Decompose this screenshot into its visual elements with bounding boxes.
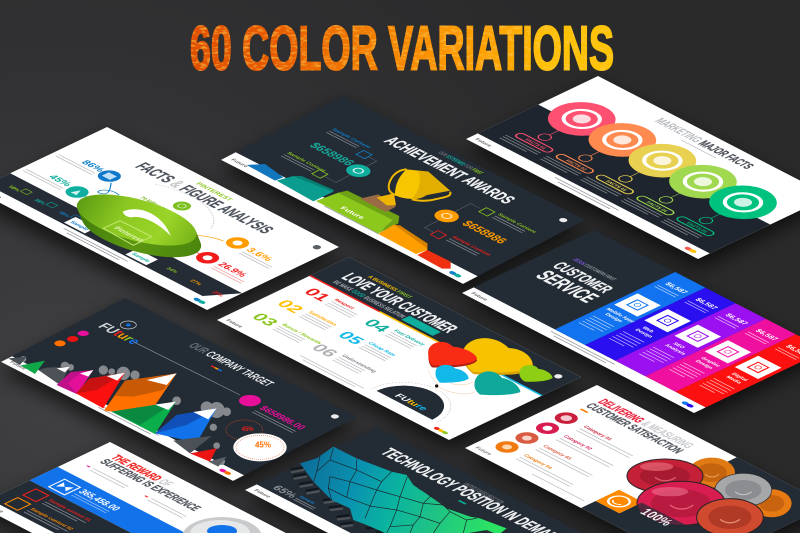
- dark band figures: 34%: [164, 267, 179, 274]
- icon: 3d green disc: [72, 184, 206, 268]
- dark band figures: 27%: [188, 279, 203, 287]
- smiley tile: [596, 490, 643, 513]
- state lines: [313, 448, 477, 533]
- item 05: Cheap Rate: [366, 341, 397, 357]
- heading: [97, 453, 214, 513]
- item 03: [247, 311, 324, 350]
- chart: us map: [292, 447, 507, 533]
- stat: 65%: [269, 484, 300, 500]
- footer: Future: [8, 361, 28, 371]
- dark band figures: Sample: [68, 220, 90, 232]
- category 02: Category 02: [561, 435, 593, 451]
- icon: blue stat: [55, 148, 126, 184]
- heading: LOVE YOUR CUSTOMER: [337, 270, 463, 335]
- colour key: [210, 365, 222, 371]
- column: graphic design: Graphic: [699, 356, 722, 368]
- dark band figures: 39%: [56, 211, 71, 218]
- notes: [84, 465, 186, 518]
- icon: 3d green disc: Pinterest: [112, 225, 146, 243]
- item 05: 05: [333, 329, 368, 347]
- heading: [582, 396, 697, 455]
- icon: red stat: [191, 250, 258, 283]
- logo and list: company target: FUture: [94, 321, 144, 347]
- map shadow stripes: [292, 467, 390, 532]
- value: $658986.00: [256, 405, 308, 431]
- sample content labels: [279, 128, 538, 261]
- chart: smiley discs: [617, 458, 792, 533]
- category 03: [511, 430, 604, 478]
- disc: crimson: [637, 481, 725, 525]
- sample content labels: Sample Content: [330, 128, 372, 149]
- footer: Future: [473, 446, 493, 456]
- item 01: [299, 286, 364, 319]
- column: seo analysis: [615, 303, 766, 376]
- column: seo analysis: Analysis: [663, 343, 687, 356]
- footer: Future: [473, 138, 493, 148]
- category 04: [491, 439, 585, 487]
- category 01: Category 01: [581, 425, 613, 441]
- footer: Future: [229, 158, 249, 168]
- column: seo analysis: SEO: [671, 342, 686, 350]
- orange value: $658986: [459, 219, 511, 245]
- category 03: Category 03: [541, 444, 573, 461]
- icon: reward disc: [182, 517, 262, 533]
- panel: love your customer slide: [217, 257, 581, 440]
- panel: customer service slide: [462, 230, 800, 413]
- heading: THE REWARD OF: [108, 453, 177, 488]
- panel: company target slide: [1, 298, 357, 481]
- trophy: [360, 169, 450, 212]
- stat: [269, 484, 322, 511]
- footer logo: Future: [252, 489, 272, 499]
- logo dome: FUture: [392, 392, 430, 412]
- icon: butterfly: [49, 479, 80, 495]
- value: 365,458.00: [75, 488, 122, 512]
- footer: [473, 446, 584, 503]
- step 5: [658, 179, 791, 244]
- chart: mountain targets: [8, 356, 231, 467]
- teal marker: [458, 500, 467, 504]
- icon: center green badge: 70 Million Users: [138, 196, 176, 215]
- icon: center green badge: [138, 188, 195, 217]
- icon: orange stat: [220, 235, 287, 269]
- step 3: FACTS 03: [605, 180, 628, 192]
- column: mobile apps design: [555, 272, 707, 346]
- column: graphic design: [645, 319, 796, 392]
- disc: red orange: [697, 499, 763, 533]
- logo and list: company target: 45%: [255, 441, 271, 450]
- column: digital media: [676, 334, 800, 407]
- heart: green: [519, 365, 553, 382]
- column: web design: [585, 288, 736, 361]
- footer: [229, 103, 569, 278]
- icon: blue stat: 86%: [78, 159, 107, 174]
- panel: marketing major facts slide: [466, 76, 800, 259]
- column: mobile apps design: $6,587: [663, 281, 689, 295]
- column: mobile apps design: Design: [603, 313, 624, 323]
- step 1: [496, 95, 630, 161]
- footer: Future: [224, 319, 244, 329]
- step 2: [537, 116, 670, 182]
- icon: red stat: 26.9%: [215, 261, 249, 279]
- item 02: 02: [273, 298, 307, 315]
- panel: customer satisfaction slide: [465, 385, 800, 533]
- sample content labels: Sample Content: [285, 151, 327, 173]
- heart: cyan: [435, 365, 469, 383]
- chart: balloon hearts: [428, 338, 553, 395]
- category 04: Category 04: [521, 454, 553, 470]
- subheading: A BUSINESS FIRST: [366, 275, 413, 300]
- footer: Future: [469, 292, 489, 302]
- item 03: Bonus / Rewards: [280, 323, 323, 345]
- step 4: [618, 158, 751, 223]
- step 2: FACTS 02: [565, 159, 588, 171]
- icon: orange stat: 3.6%: [243, 247, 275, 263]
- item 04: [359, 317, 427, 351]
- item 06: [307, 342, 379, 378]
- item 01: Respect: [332, 298, 356, 310]
- teal value: $658986: [306, 141, 358, 167]
- item 06: 06: [307, 342, 342, 359]
- item 02: Satisfaction: [306, 311, 338, 327]
- logo and list: company target: 45%: [242, 427, 254, 433]
- icon: orange item: Sample content 02: [28, 507, 74, 531]
- heart: red: [428, 342, 477, 368]
- heart: yellow: [463, 338, 533, 375]
- item 02: [273, 298, 339, 332]
- heading: FACTS & FIGURE ANALYSIS: [131, 160, 278, 236]
- heading: ACHIEVEMENT AWARDS: [380, 134, 520, 206]
- connectors: [324, 152, 480, 233]
- disc: orange back: [688, 458, 735, 488]
- heading: CUSTOMER SATISFACTION: [582, 402, 687, 455]
- sample content labels: Sample Content: [496, 213, 538, 234]
- disc: orange right: [752, 489, 792, 517]
- logo on podium: Future: [339, 206, 365, 221]
- column: graphic design: $6,587: [753, 328, 780, 342]
- dark band figures: 25%: [210, 290, 225, 298]
- column: web design: $6,587: [693, 297, 720, 311]
- column: seo analysis: $6,587: [723, 313, 750, 326]
- logo dome: [372, 373, 470, 422]
- footer: [469, 292, 695, 409]
- item 06: Understanding: [340, 354, 378, 374]
- footer: [0, 134, 323, 305]
- disc: red top: [627, 459, 703, 493]
- footer: [8, 304, 342, 476]
- icon: red item: Sample content 01: [46, 499, 93, 522]
- orange marker: [580, 409, 589, 413]
- dark band figures: [1, 183, 229, 300]
- orange badge: [429, 207, 464, 225]
- logo and list: company target: [54, 321, 287, 461]
- chart: podium blocks and trophy: [247, 164, 451, 269]
- connector curves: [84, 169, 253, 254]
- heading: SERVICE: [530, 268, 605, 305]
- step 5: FACTS 05: [685, 221, 709, 234]
- panel: the reward slide: [0, 442, 342, 533]
- dark band figures: 38%: [32, 198, 47, 206]
- step 1: FACTS 01: [524, 138, 548, 150]
- column: web design: Design: [633, 328, 654, 339]
- item 05: [333, 329, 398, 362]
- panel: 100 percent overlay: [617, 503, 702, 533]
- tagline: BE MAKE GOOD BUSINESS RELATION: [331, 280, 407, 319]
- icon: teal stat: 45%: [45, 174, 74, 188]
- dark band figures: Sample: [129, 252, 151, 263]
- map outline: [300, 447, 507, 533]
- subheading: PINTEREST: [194, 182, 234, 202]
- icon: orange item: [5, 498, 76, 533]
- teal tag: [401, 316, 441, 336]
- step 4: FACTS 04: [645, 201, 669, 213]
- item 04: Fast Delivery: [392, 329, 426, 347]
- step 3: [577, 137, 710, 202]
- heading: CUSTOMER: [548, 260, 617, 295]
- panel: technology position slide: [245, 427, 609, 533]
- icon: red item: [23, 489, 94, 525]
- category 01: [550, 410, 645, 458]
- heading: DELIVERING & MEASURING: [595, 397, 697, 450]
- category 02: [531, 420, 625, 468]
- item 04: 04: [359, 317, 394, 334]
- disc: grey: [715, 473, 772, 507]
- heading: MARKETING MAJOR FACTS: [651, 116, 758, 171]
- column: digital media: Media: [724, 375, 743, 385]
- dark band figures: 58%: [6, 185, 21, 193]
- subheading: OUR ESTEEMED FOR FIRST: [436, 151, 484, 176]
- item 01: 01: [299, 286, 334, 303]
- colour rule: [309, 275, 543, 396]
- column: graphic design: Design: [693, 359, 714, 370]
- icon: teal stat: [21, 164, 93, 200]
- column: digital media: Digital: [729, 372, 749, 382]
- teal badge: [341, 162, 376, 180]
- heading: OUR COMPANY TARGET: [185, 341, 278, 388]
- heading: [528, 260, 619, 305]
- panel: achievement awards slide: [221, 96, 585, 284]
- subheading: UNITED STATES BEST FOR: [461, 482, 506, 505]
- column: web design: Web: [640, 326, 655, 334]
- panel: facts and figure analysis slide: [0, 127, 339, 310]
- footer: [473, 138, 698, 254]
- item 03: 03: [247, 311, 282, 328]
- heart: teal: [474, 371, 520, 395]
- subheading: JESUS CUSTOMERS FIRST: [571, 258, 617, 282]
- footer: [224, 263, 566, 435]
- sample content labels: Sample Content: [450, 235, 492, 257]
- column: mobile apps design: Mobile Apps: [604, 307, 637, 324]
- stat: Sample: [298, 495, 317, 505]
